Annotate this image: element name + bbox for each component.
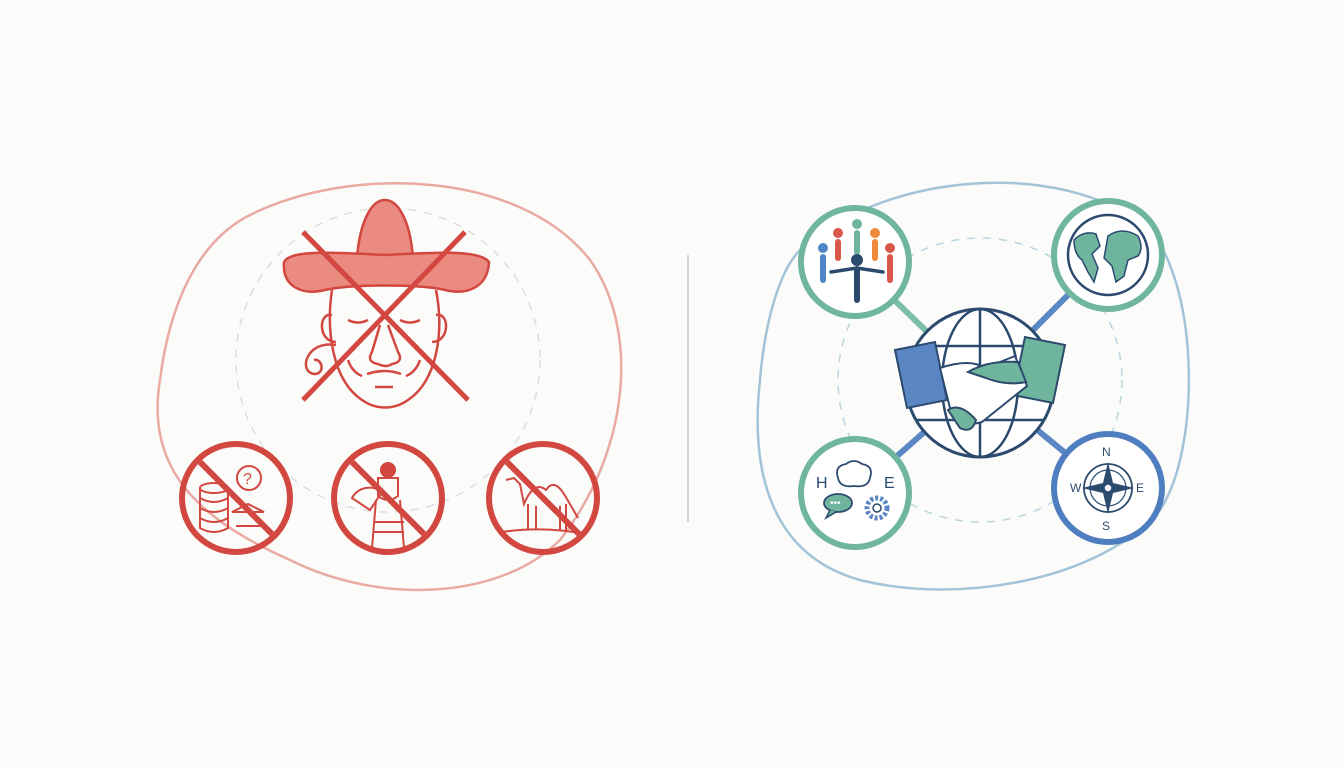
panel: stereotypes (left) xyxy=(158,183,621,590)
icon: no camel xyxy=(489,444,597,552)
node: compass xyxy=(1054,434,1162,542)
node: mind, communication, skills xyxy=(801,439,909,547)
node: people community xyxy=(801,208,909,316)
node: mind, communication, skills: ••• xyxy=(830,498,841,509)
connectors xyxy=(855,255,1108,493)
node: compass: W xyxy=(1070,481,1082,495)
node: mind, communication, skills: E xyxy=(884,475,895,492)
node: compass: E xyxy=(1136,481,1144,495)
divider xyxy=(687,255,689,522)
node: compass: N xyxy=(1102,445,1111,459)
icon: sombrero face crossed out xyxy=(284,200,489,408)
panel: global connection (right) xyxy=(758,183,1189,589)
icon: no money/stereotype xyxy=(182,444,290,552)
icon: no money/stereotype: ? xyxy=(243,471,252,488)
left blob outline xyxy=(158,183,621,590)
right blob outline xyxy=(758,183,1189,589)
icon: globe with handshake xyxy=(895,309,1065,457)
node: mind, communication, skills: H xyxy=(816,475,828,492)
node: compass: S xyxy=(1102,519,1110,533)
icon: no geisha xyxy=(334,444,442,552)
node: world map xyxy=(1054,201,1162,309)
